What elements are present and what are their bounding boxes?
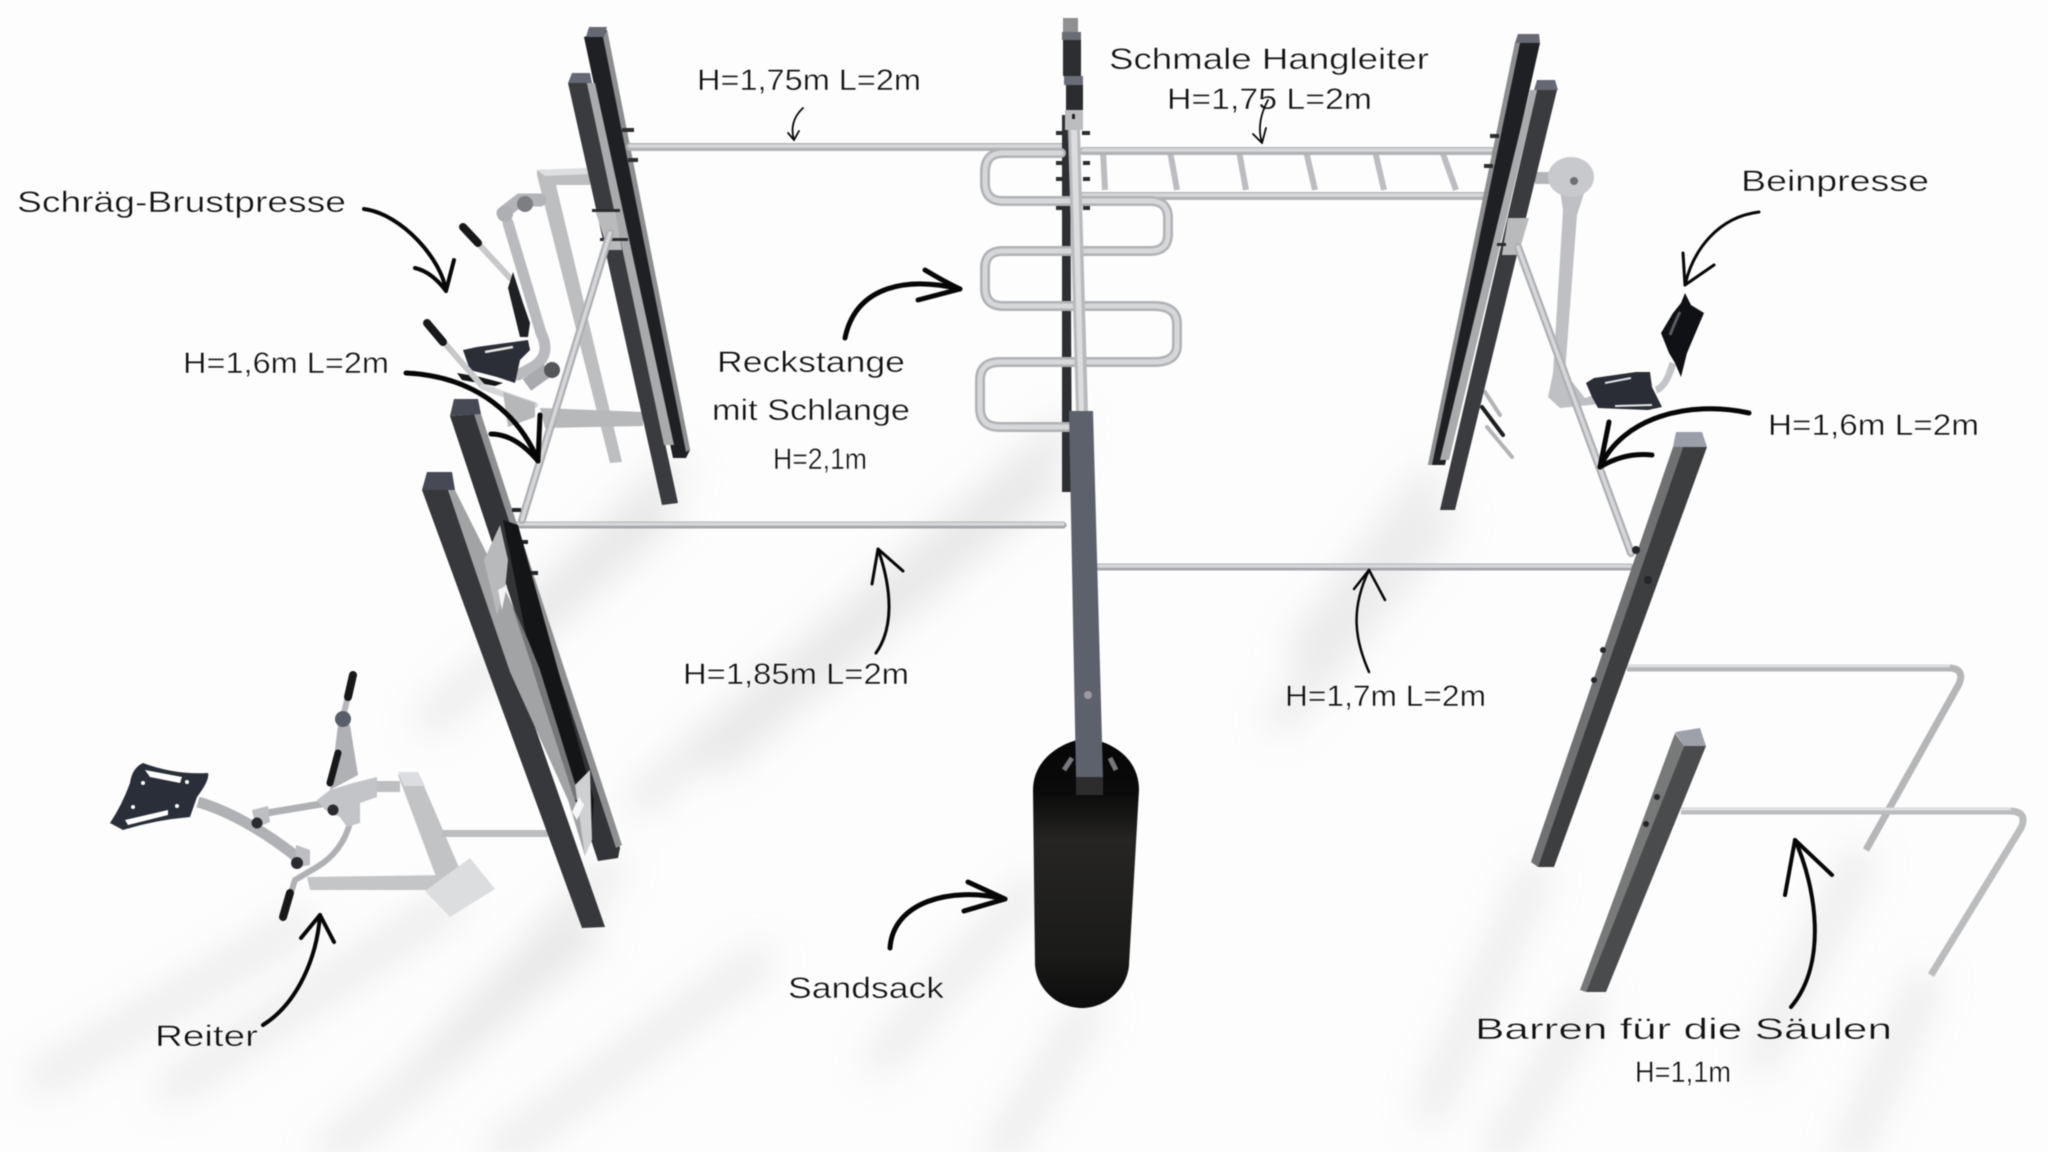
arrow: Barren bbox=[1785, 840, 1832, 1007]
arrow: Reckstange bbox=[845, 270, 960, 338]
arrow: right diagonal bbox=[1600, 409, 1749, 467]
bar: Reckstange mit Schlange bbox=[980, 153, 1177, 427]
label: H=1,6m L=2m left: H=1,6m L=2m bbox=[183, 347, 389, 380]
post: front left rear bbox=[450, 399, 622, 861]
post: parallel bars bbox=[1580, 728, 1706, 992]
label: H=1,7m L=2m: H=1,7m L=2m bbox=[1285, 680, 1486, 713]
post: back left rear bbox=[584, 27, 690, 458]
pivot bolt bbox=[1570, 177, 1578, 185]
handles behind post bbox=[1482, 392, 1512, 457]
seat pad bbox=[1586, 372, 1662, 410]
base bbox=[1548, 373, 1600, 408]
seat slots bbox=[125, 770, 189, 825]
axle bbox=[1535, 172, 1551, 184]
arrow: left diagonal bbox=[406, 373, 540, 461]
barren: front bar bbox=[1681, 809, 2023, 975]
bar: front right H=1,7m bbox=[1098, 566, 1630, 567]
knob top bbox=[335, 711, 351, 727]
post: center front with sandbag bbox=[1069, 411, 1103, 795]
lower handle bbox=[427, 323, 535, 405]
barren: rear bar bbox=[1627, 666, 1961, 850]
frame bbox=[307, 772, 548, 917]
link bbox=[267, 803, 327, 813]
lower grip bbox=[283, 893, 290, 917]
bolts right bbox=[1484, 134, 1506, 246]
post: back right front bbox=[1440, 80, 1558, 510]
arrow: Reiter bbox=[263, 915, 334, 1025]
column bbox=[1553, 190, 1585, 373]
machine: Schräg-Brustpresse bbox=[427, 168, 643, 463]
upper handle bbox=[463, 227, 510, 278]
label: Reiter: Reiter bbox=[155, 1020, 258, 1053]
bolts bbox=[1643, 794, 1660, 827]
seat pad bbox=[110, 763, 208, 830]
label: H=1,1m: H=1,1m bbox=[1635, 1056, 1731, 1089]
hub bbox=[317, 777, 377, 827]
sandbag bbox=[1033, 738, 1139, 1008]
label: Barren für die Säulen: Barren für die Säulen bbox=[1475, 1013, 1892, 1046]
back pad bbox=[1661, 293, 1704, 377]
second grip bbox=[330, 753, 338, 783]
joints bbox=[252, 804, 338, 869]
label: H=1,75 L=2m: H=1,75 L=2m bbox=[1167, 83, 1372, 116]
arrow: ladder bbox=[1253, 100, 1268, 143]
post: front right bbox=[1531, 432, 1707, 867]
post: front left front bbox=[422, 472, 605, 928]
bar: front left H=1,85m bbox=[518, 524, 1063, 525]
diagonal: left bbox=[522, 233, 610, 520]
plate lower bbox=[575, 770, 592, 856]
label: H=2,1m: H=2,1m bbox=[773, 443, 867, 476]
bolts bbox=[512, 508, 538, 575]
upper handle bbox=[343, 675, 353, 717]
machine: Beinpresse bbox=[1535, 157, 1704, 410]
lower joint and base bbox=[503, 362, 560, 427]
diagonal: right bbox=[1518, 247, 1631, 553]
black rail between front posts bbox=[503, 520, 594, 845]
bar: upper left H=1,75m bbox=[630, 146, 1063, 147]
ladder: Schmale Hangleiter bbox=[1083, 150, 1507, 196]
wedge bbox=[330, 725, 358, 790]
mid plate shade bbox=[510, 600, 580, 800]
upper grip bbox=[348, 675, 353, 697]
label: Beinpresse: Beinpresse bbox=[1741, 165, 1929, 198]
bolts bbox=[622, 128, 638, 162]
post: back right rear bbox=[1428, 34, 1540, 465]
label: Sandsack: Sandsack bbox=[788, 972, 945, 1005]
machine: Reiter bbox=[110, 675, 548, 917]
lower handle arm bbox=[287, 823, 350, 905]
post: back center rear bbox=[1062, 18, 1081, 492]
mounting plate bbox=[484, 525, 508, 615]
bracket bbox=[1502, 218, 1529, 255]
column and pivot bbox=[497, 196, 545, 375]
label: Reckstange: Reckstange bbox=[717, 346, 905, 379]
label: Schräg-Brustpresse: Schräg-Brustpresse bbox=[17, 186, 346, 219]
arrow: front right bar bbox=[1354, 570, 1385, 672]
arrow: Beinpresse bbox=[1683, 212, 1759, 285]
grey side strip bbox=[448, 490, 590, 856]
bolts center bbox=[1056, 131, 1090, 210]
bolts bbox=[1591, 546, 1652, 683]
post: back center front bbox=[1064, 76, 1083, 130]
arrow: Sandsack bbox=[890, 882, 1005, 948]
label: H=1,75m L=2m: H=1,75m L=2m bbox=[697, 64, 921, 97]
curved seat arm bbox=[198, 802, 297, 857]
bolt bbox=[1084, 691, 1092, 699]
bracket bbox=[595, 210, 622, 250]
vertical tube bbox=[1068, 130, 1088, 412]
label: Schmale Hangleiter: Schmale Hangleiter bbox=[1109, 43, 1429, 76]
wheel bbox=[1548, 157, 1594, 197]
arrow: upper bar bbox=[788, 108, 803, 140]
floor shadows bbox=[40, 430, 1925, 1152]
post: back left front bbox=[568, 73, 678, 505]
label: H=1,6m L=2m right: H=1,6m L=2m bbox=[1768, 409, 1979, 442]
arrow: front left bar bbox=[872, 549, 903, 653]
frame bbox=[537, 168, 643, 463]
curved tube bbox=[1656, 363, 1673, 390]
bolts bbox=[592, 209, 628, 241]
slots bbox=[498, 585, 507, 610]
arrow: Schräg-Brustpresse bbox=[364, 209, 454, 291]
sandbag mount bbox=[1064, 758, 1116, 770]
backrest pad bbox=[508, 272, 530, 337]
seat pad bbox=[457, 340, 530, 386]
label: mit Schlange: mit Schlange bbox=[712, 394, 910, 427]
label: H=1,85m L=2m: H=1,85m L=2m bbox=[683, 658, 909, 691]
